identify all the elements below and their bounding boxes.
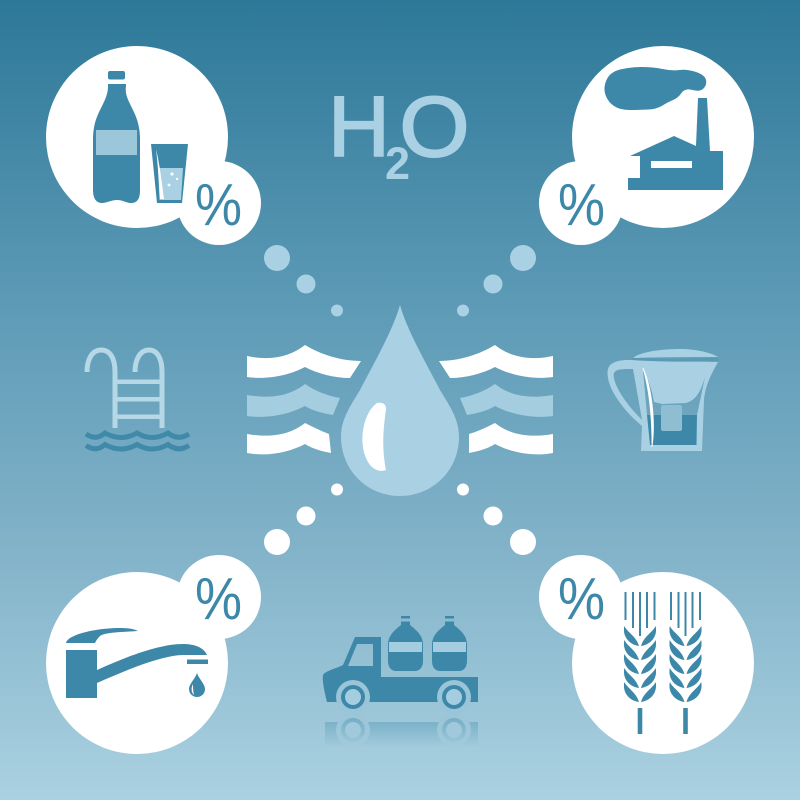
icon: bottle <box>93 71 140 203</box>
water level <box>647 415 697 445</box>
waves: left <box>247 345 361 454</box>
title: H2O: 2 <box>385 138 410 189</box>
title: H2O <box>328 80 470 189</box>
icon: water filter pitcher <box>608 349 718 451</box>
truck reflection <box>325 718 478 740</box>
icon: wheat ears <box>624 592 702 734</box>
water bottle right <box>432 616 467 671</box>
icon: smoke cloud <box>604 67 706 110</box>
percent sign: % <box>195 172 242 238</box>
dots: top right <box>457 245 536 316</box>
icon: delivery truck with water bottles <box>323 616 478 714</box>
dots: top left <box>264 245 343 316</box>
panel: bottled water <box>46 46 261 245</box>
icon: central water drop <box>341 305 459 496</box>
percent sign: % <box>558 566 605 632</box>
title: H2O: O <box>400 80 470 175</box>
lid <box>633 349 718 358</box>
icon: swimming pool ladder <box>86 350 189 449</box>
lid seam <box>632 358 718 362</box>
dots: bottom left <box>264 484 343 555</box>
dots: bottom right <box>457 484 536 555</box>
waves: right <box>439 345 553 454</box>
panel: tap water <box>46 555 261 754</box>
wheels <box>336 680 471 714</box>
panel: agriculture <box>539 555 754 754</box>
icon: factory <box>628 98 723 190</box>
title: H2O: H <box>328 80 390 175</box>
percent sign: % <box>558 172 605 238</box>
water bottle left <box>388 616 423 671</box>
icon: glass of water <box>151 144 188 203</box>
glass highlight <box>643 368 653 447</box>
icon: faucet <box>66 628 208 698</box>
percent sign: % <box>195 566 242 632</box>
filter cartridge <box>661 405 682 431</box>
panel: industry <box>539 46 754 245</box>
truck body <box>323 637 478 702</box>
